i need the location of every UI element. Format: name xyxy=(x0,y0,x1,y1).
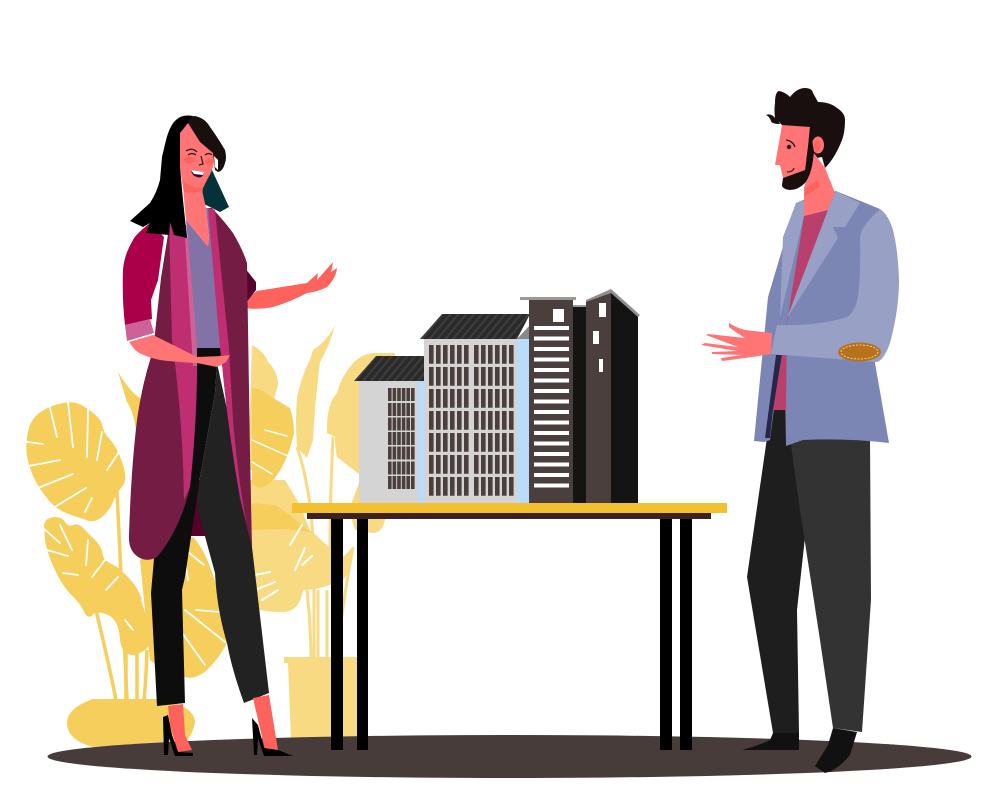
plant: left spike leaf xyxy=(118,372,146,450)
man: sleeve xyxy=(771,209,899,362)
woman: neck and face xyxy=(180,118,216,246)
woman: mouth xyxy=(191,170,204,177)
plant: centre monstera leaf xyxy=(140,537,228,678)
man: right shoe xyxy=(815,728,857,773)
man: jacket inner lining xyxy=(765,355,786,438)
woman: left sleeve xyxy=(123,223,164,325)
woman: ear and cheeks xyxy=(174,149,213,165)
man: left pant leg xyxy=(747,410,808,733)
ground shadow xyxy=(48,735,972,778)
woman: top xyxy=(186,208,220,348)
building model xyxy=(354,289,640,503)
man: hand xyxy=(701,323,772,361)
plant: large monstera leaf xyxy=(26,402,125,521)
man: shirt xyxy=(773,210,828,410)
woman: black hair xyxy=(130,116,193,238)
plant: right light leaves xyxy=(248,325,395,612)
man: left shoe xyxy=(742,733,799,750)
woman: pants xyxy=(151,348,269,706)
plant: right stems xyxy=(297,437,353,660)
woman: gap fabric between legs xyxy=(188,480,210,536)
pot: right xyxy=(284,657,357,740)
man: hair xyxy=(766,88,845,168)
woman: right arm xyxy=(245,262,337,309)
woman: front hair xyxy=(188,116,226,172)
plant: left stems xyxy=(96,492,147,700)
woman: left shoe and foot xyxy=(163,704,193,756)
woman: right cuff xyxy=(240,262,256,307)
man: neck xyxy=(804,153,835,216)
man: ear xyxy=(812,136,824,154)
table legs xyxy=(331,519,692,750)
woman: forearm and hand xyxy=(129,335,230,367)
man: jacket body xyxy=(754,191,889,446)
man: face xyxy=(775,125,810,178)
woman: rolled cuff xyxy=(125,319,154,341)
man: elbow patch xyxy=(838,342,881,362)
woman: cardigan front strips xyxy=(169,208,247,525)
pot: left xyxy=(67,699,195,747)
plant: lower monstera leaf xyxy=(43,517,151,655)
table xyxy=(292,503,727,750)
woman: cardigan right panel xyxy=(208,208,252,547)
man xyxy=(701,88,899,773)
woman: back hair xyxy=(202,167,229,212)
woman: chin shadow xyxy=(183,181,203,193)
small building xyxy=(354,356,424,503)
plant: right darker leaf xyxy=(252,388,312,600)
background plants xyxy=(26,325,395,747)
man: right lapel xyxy=(787,191,860,318)
man: beard xyxy=(782,127,814,190)
man: left lapel xyxy=(780,200,804,317)
tower with white stripes xyxy=(520,297,587,503)
tower with small windows xyxy=(586,289,640,503)
man: right pant leg xyxy=(790,438,871,732)
woman: right shoe and foot xyxy=(252,695,293,756)
table top xyxy=(292,503,727,513)
woman: cardigan left panel xyxy=(129,222,197,560)
woman: eyes and nose xyxy=(186,149,212,165)
man: eye and smile xyxy=(786,140,795,172)
middle building xyxy=(420,314,530,503)
woman xyxy=(123,116,337,756)
